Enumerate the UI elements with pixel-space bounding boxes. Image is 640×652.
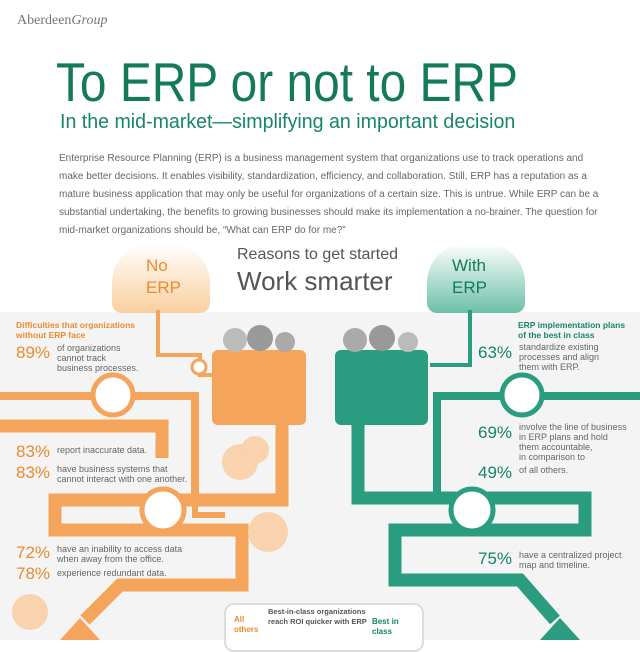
title: To ERP or not to ERP: [56, 51, 518, 113]
panel: left stats: 78%: [16, 564, 50, 583]
panel: left stats: cannot track: [57, 353, 106, 363]
panel: right stats: have a centralized project: [519, 550, 622, 560]
heading right: ERP implementation plans: [518, 320, 625, 330]
panel: right stats: processes and align: [519, 352, 599, 362]
cloud: No ERP: No: [146, 256, 168, 275]
ROI box: reach ROI quicker with ERP: [268, 617, 367, 626]
background lower panel: [0, 312, 640, 640]
panel: left stats: when away from the office.: [57, 554, 164, 564]
heading: reasons: [237, 246, 398, 296]
panel: left stats: report inaccurate data.: [57, 445, 147, 455]
ROI box: class: [372, 627, 392, 636]
heading left: [16, 320, 135, 340]
heading left: without ERP face: [16, 330, 85, 340]
panel: left stats: 72%: [16, 543, 50, 562]
intro paragraph: Enterprise Resource Planning (ERP) is a business management system that organizations use to track operations and make better decisions. It enables visibility, standardization, efficiency, and collaboration. Still, ERP has a reputation as a mature business application that may only be useful for organizations of a certain size. This is untrue. While ERP can be a substantial undertaking, the benefits to growing businesses should make its implementation a no-brainer. The question for mid-market organizations should be, “What can ERP do for me?”: [59, 153, 598, 236]
gauges: [93, 360, 542, 531]
panel: left stats: have an inability to access data: [57, 544, 182, 554]
funnels: [60, 618, 100, 640]
ROI box: [224, 603, 424, 652]
panel: right stats: [478, 320, 627, 570]
heading: reasons: Reasons to get started: [237, 246, 398, 263]
panel: left stats: 83%: [16, 442, 50, 461]
panel: left stats: business processes.: [57, 363, 139, 373]
panel: right stats: 49%: [478, 463, 512, 482]
panel: left stats: have business systems that: [57, 464, 168, 474]
panel: right stats: 63%: [478, 343, 512, 362]
cloud: No ERP: [112, 243, 210, 313]
panel: right stats: map and timeline.: [519, 560, 590, 570]
panel: right stats: in comparison to: [519, 452, 585, 462]
heading right: [518, 320, 625, 340]
ROI box: Best-in-class organizations: [268, 607, 366, 616]
panel: right stats: in ERP plans and hold: [519, 432, 608, 442]
heading left: Difficulties that organizations: [16, 320, 135, 330]
ROI box: Best in: [372, 617, 399, 626]
logo: AberdeenGroup: [17, 13, 107, 28]
cloud: With ERP: With: [452, 256, 486, 275]
panel: right stats: 75%: [478, 549, 512, 568]
heading: reasons: Work smarter: [237, 266, 393, 296]
panel: right stats: 69%: [478, 423, 512, 442]
panel: right stats: them accountable,: [519, 442, 593, 452]
panel: right stats: standardize existing: [519, 342, 599, 352]
cloud: No ERP: ERP: [146, 278, 181, 297]
tanks: [212, 325, 428, 425]
clouds of steam: [12, 436, 288, 630]
panel: right stats: involve the line of business: [519, 422, 627, 432]
panel: left stats: 83%: [16, 463, 50, 482]
panel: right stats: them with ERP.: [519, 362, 580, 372]
panel: right stats: of all others.: [519, 465, 568, 475]
subtitle: In the mid-market—simplifying an important decision: [60, 111, 515, 133]
panel: left stats: 89%: [16, 343, 50, 362]
cloud: With ERP: ERP: [452, 278, 487, 297]
panel: left stats: [16, 320, 187, 583]
cloud: With ERP: [427, 243, 525, 313]
heading right: of the best in class: [518, 330, 595, 340]
ROI box: All: [234, 615, 244, 624]
ROI box: others: [234, 625, 258, 634]
panel: left stats: experience redundant data.: [57, 568, 167, 578]
panel: left stats: cannot interact with one another.: [57, 474, 187, 484]
pipes diagram: [0, 310, 640, 640]
panel: left stats: of organizations: [57, 343, 121, 353]
